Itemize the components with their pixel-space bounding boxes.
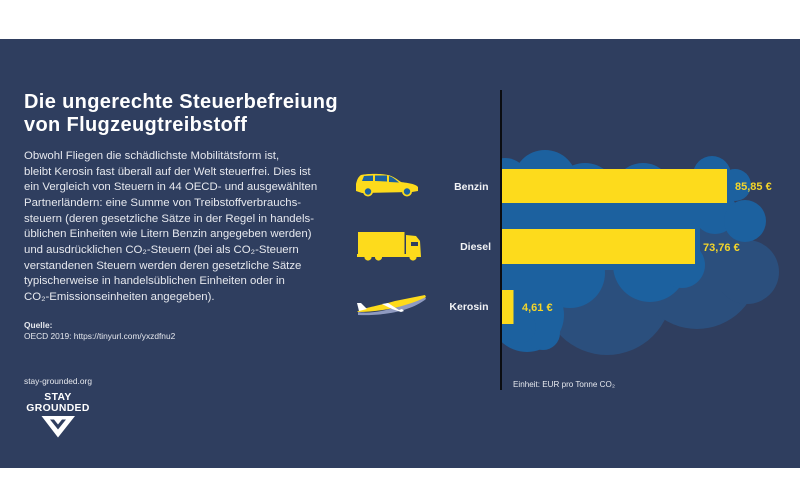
value: Kerosin: 4,61 € — [522, 302, 553, 314]
body text: ein Vergleich von Steuern in 44 OECD- und ausgewählten — [24, 181, 317, 193]
logo text — [26, 392, 90, 414]
website: stay-grounded.org — [24, 376, 92, 386]
logo: Stay Grounded — [26, 392, 90, 438]
body text: Partnerländern: eine Summe von Treibstoffverbrauchs- — [24, 197, 301, 209]
title: Die ungerechte Steuerbefreiung — [24, 91, 338, 113]
body text: bleibt Kerosin fast überall auf der Welt steuerfrei. Dies ist — [24, 166, 311, 178]
logo text: GROUNDED — [26, 403, 90, 414]
cloud: bright foreground — [481, 150, 766, 352]
icon: plane — [357, 295, 426, 315]
body text: verstandenen Steuern werden deren gesetzliche Sätze — [24, 260, 301, 272]
bar: Diesel — [501, 229, 695, 264]
label: Diesel: Diesel — [460, 241, 491, 253]
source: OECD 2019: https://tinyurl.com/yxzdfnu2 — [24, 331, 175, 341]
value: Diesel: 73,76 € — [703, 242, 740, 254]
label: Kerosin: Kerosin — [449, 301, 488, 313]
bar: Benzin — [501, 169, 727, 203]
icon: car — [356, 174, 418, 196]
label: Benzin: Benzin — [454, 181, 488, 193]
title: von Flugzeugtreibstoff — [24, 114, 247, 136]
value: Benzin: 85,85 € — [735, 181, 772, 193]
body text: steuern (deren gesetzliche Sätze in der Regel in handels- — [24, 213, 314, 225]
logo mark — [42, 416, 75, 438]
body text: üblichen Einheiten wie Litern Benzin angegeben werden) — [24, 228, 312, 240]
body text: CO₂-Emissionseinheiten angegeben). — [24, 291, 215, 303]
unit note: Einheit: EUR pro Tonne CO₂ — [513, 380, 615, 389]
chart — [356, 90, 779, 390]
cloud: dark background — [560, 228, 779, 355]
icon: truck — [357, 232, 421, 261]
source — [24, 320, 175, 341]
body text: Obwohl Fliegen die schädlichste Mobilitätsform ist, — [24, 150, 279, 162]
body text — [24, 150, 317, 303]
body text: typischerweise in handelsüblichen Einheiten oder in — [24, 275, 285, 287]
logo text: STAY — [44, 392, 72, 403]
source: Quelle: — [24, 320, 52, 330]
body text: und ausdrücklichen CO₂-Steuern (bei als CO₂-Steuern — [24, 244, 299, 256]
bar: Kerosin — [501, 290, 514, 324]
axis line — [500, 90, 502, 390]
title — [24, 91, 338, 136]
